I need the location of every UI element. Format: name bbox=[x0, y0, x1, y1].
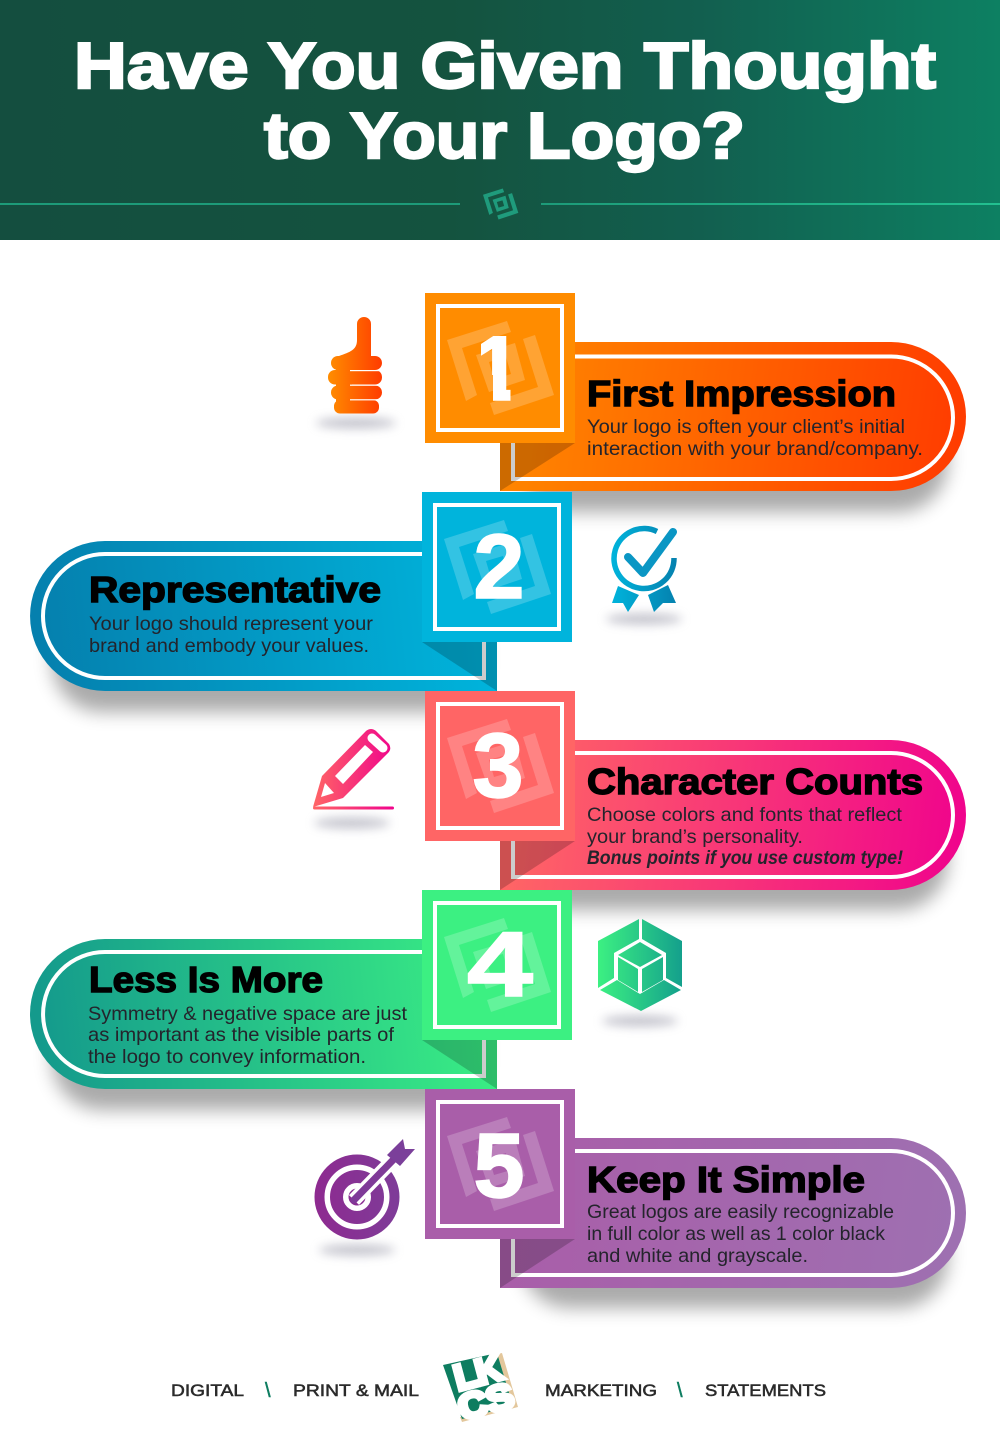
number badge 4: 4 bbox=[467, 914, 533, 1016]
step 3: character counts bbox=[425, 691, 966, 910]
footer: \ bbox=[265, 1380, 271, 1402]
number badge 1 bbox=[425, 293, 575, 443]
body text bbox=[587, 416, 923, 460]
number badge 1: 1 bbox=[471, 318, 523, 420]
body text: Bonus points if you use custom type! bbox=[587, 847, 903, 869]
heading: Less Is More bbox=[89, 959, 323, 1000]
heading: First Impression bbox=[587, 373, 896, 414]
icon: award check bbox=[606, 529, 682, 624]
body text: Your logo should represent your bbox=[89, 613, 374, 635]
icon: target and arrow bbox=[319, 1139, 415, 1256]
number badge 2: 2 bbox=[473, 516, 525, 618]
body text bbox=[89, 613, 374, 657]
body text: Great logos are easily recognizable bbox=[587, 1201, 894, 1223]
footer: \ bbox=[677, 1380, 683, 1402]
header banner bbox=[0, 0, 1000, 240]
step 4: less is more bbox=[30, 890, 572, 1110]
icon: header logo mark bbox=[483, 188, 518, 220]
icon: thumbs up bbox=[316, 317, 396, 428]
number badge 4 bbox=[422, 890, 572, 1040]
step 1: first impression bbox=[425, 293, 966, 512]
icon: LKCS logo: LK bbox=[449, 1346, 506, 1399]
footer: DIGITAL bbox=[171, 1381, 244, 1400]
number badge 3 bbox=[425, 691, 575, 841]
footer: MARKETING bbox=[545, 1381, 657, 1400]
body text bbox=[587, 804, 903, 869]
icon: pencil bbox=[313, 729, 394, 828]
body text: Your logo is often your client’s initial bbox=[587, 416, 905, 438]
footer: PRINT & MAIL bbox=[293, 1381, 419, 1400]
body text bbox=[587, 1201, 894, 1267]
number badge 5: 5 bbox=[473, 1115, 525, 1217]
body text: the logo to convey information. bbox=[88, 1046, 366, 1068]
number badge 3: 3 bbox=[472, 715, 524, 817]
body text: in full color as well as 1 color black bbox=[587, 1223, 885, 1245]
body text: as important as the visible parts of bbox=[88, 1024, 395, 1046]
title bbox=[74, 29, 936, 172]
icon: LKCS logo: CS bbox=[453, 1374, 518, 1429]
body text bbox=[88, 1003, 408, 1068]
body text: Symmetry & negative space are just bbox=[88, 1003, 408, 1025]
body text: your brand’s personality. bbox=[587, 826, 803, 848]
footer bbox=[171, 1345, 826, 1429]
icon: LKCS logo bbox=[443, 1345, 518, 1429]
heading: Character Counts bbox=[587, 761, 923, 802]
heading: Keep It Simple bbox=[587, 1159, 865, 1200]
footer: STATEMENTS bbox=[705, 1381, 826, 1400]
title: Have You Given Thought bbox=[74, 29, 936, 102]
step 5: keep it simple bbox=[425, 1089, 966, 1308]
body text: Choose colors and fonts that reflect bbox=[587, 804, 903, 826]
heading: Representative bbox=[89, 569, 381, 610]
number badge 2 bbox=[422, 492, 572, 642]
body text: brand and embody your values. bbox=[89, 635, 369, 657]
title: to Your Logo? bbox=[264, 99, 745, 172]
step 2: representative bbox=[30, 492, 572, 712]
body text: interaction with your brand/company. bbox=[587, 438, 923, 460]
number badge 5 bbox=[425, 1089, 575, 1239]
icon: hexagon cube bbox=[598, 919, 682, 1026]
body text: and white and grayscale. bbox=[587, 1245, 808, 1267]
